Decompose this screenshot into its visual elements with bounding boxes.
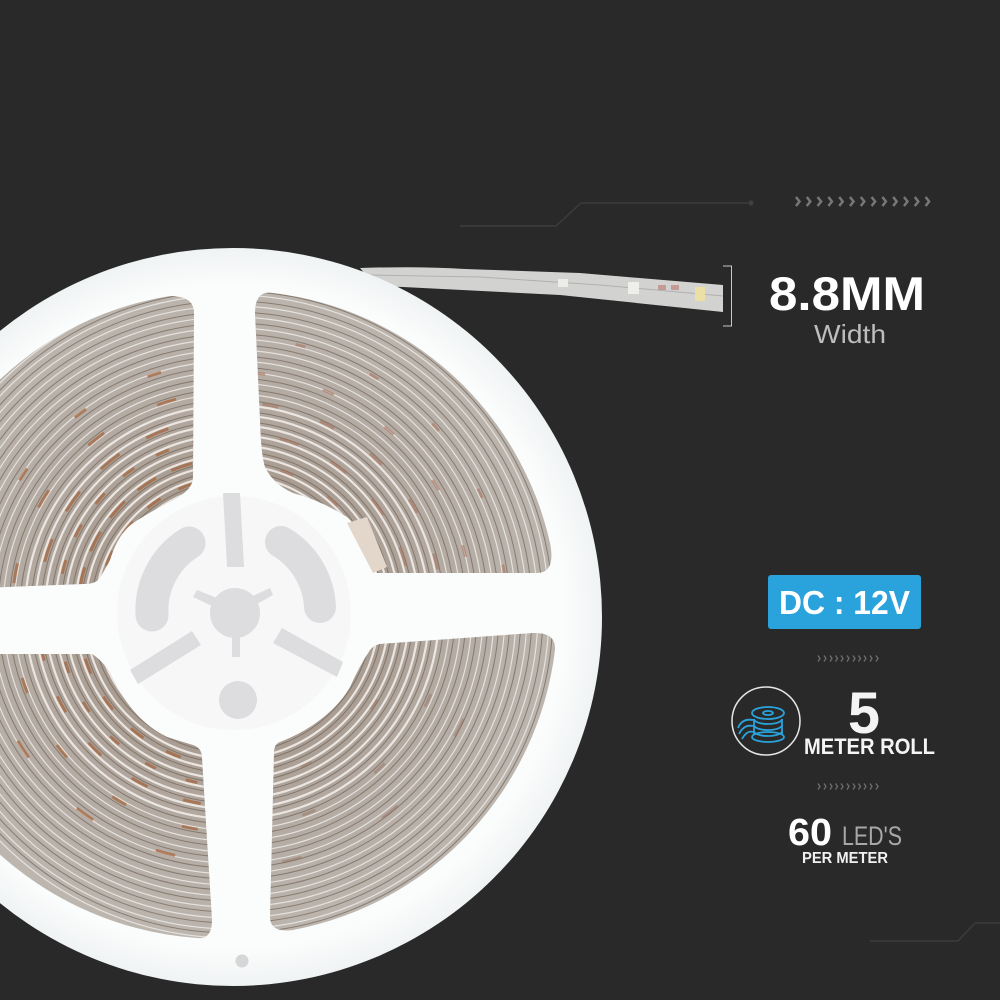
LED count label: LED'S	[842, 821, 902, 851]
reel hub inner disc	[117, 496, 351, 730]
decorative connector line bottom	[870, 923, 1000, 941]
chevron row top	[796, 197, 929, 206]
LED strip end	[360, 267, 723, 312]
width label: Width	[814, 319, 886, 349]
chevron row middle	[818, 656, 878, 662]
tape panel bottom left	[0, 654, 212, 938]
icon: spool in circle	[732, 687, 800, 755]
hub openings	[130, 493, 343, 719]
tape panel bottom right	[270, 633, 555, 930]
voltage badge	[768, 575, 921, 629]
tape panel top left	[0, 296, 194, 588]
LED strip reel	[0, 248, 602, 986]
reel outer disc	[0, 248, 602, 986]
width value: 8.8MM	[769, 267, 925, 320]
roll length number: 5	[848, 681, 880, 746]
decorative connector line top	[460, 201, 753, 226]
reel bottom notch	[236, 954, 248, 968]
LED count number: 60	[788, 812, 832, 854]
width bracket	[723, 266, 732, 326]
per meter label: PER METER	[802, 850, 888, 867]
voltage badge: DC : 12V	[779, 584, 910, 621]
tape connector	[347, 517, 387, 573]
chevron row lower	[818, 784, 878, 790]
tape panel top right	[255, 292, 552, 573]
roll length label: METER ROLL	[804, 734, 935, 759]
